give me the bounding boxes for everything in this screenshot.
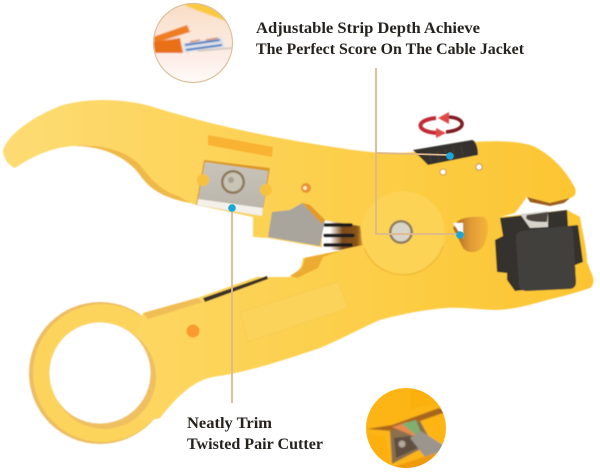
photo: stripped cable [154, 4, 232, 79]
heading: twisted pair: Twisted Pair Cutter [187, 436, 323, 453]
dark strip on lower arm [203, 276, 268, 302]
small holes [440, 169, 446, 175]
second blade [268, 203, 325, 246]
tool body outline [3, 100, 593, 422]
nose underside band [527, 197, 570, 206]
photo ring [154, 4, 232, 82]
nose blade [520, 211, 548, 228]
heading: strip depth: Adjustable Strip Depth Achieve [256, 20, 480, 37]
callout dot: knob [446, 152, 454, 160]
orange slot [208, 135, 273, 157]
callout dot: window [456, 231, 464, 239]
black clamp block [495, 210, 583, 291]
orange dot [186, 324, 200, 338]
heading: twisted pair [187, 415, 323, 453]
heading: strip depth: The Perfect Score On The Cable Jacket [256, 41, 525, 58]
stripping window [453, 217, 488, 252]
callout dot: blade [228, 204, 236, 212]
photo: cable in cutter [366, 388, 446, 468]
heading: strip depth [256, 20, 525, 58]
pivot disc [361, 191, 445, 275]
lower jaw shading [290, 250, 343, 278]
ring handle [29, 302, 171, 444]
icon: red rotation arrows [420, 112, 462, 138]
upper blade recess [196, 160, 270, 216]
pivot screw [389, 220, 413, 244]
callout lines [232, 68, 460, 403]
lower arm top edge [143, 298, 203, 319]
small rivet [301, 183, 311, 193]
lower arm raised panel [240, 282, 348, 342]
spring [322, 220, 363, 250]
ring opening [50, 322, 150, 424]
blade screw [221, 170, 245, 194]
adjustment knob [413, 140, 478, 165]
wire stripper tool [3, 100, 593, 444]
heading: twisted pair: Neatly Trim [187, 415, 272, 432]
ring inner shading [52, 325, 156, 429]
hook underside shading [75, 146, 190, 203]
upper blade [197, 162, 272, 216]
